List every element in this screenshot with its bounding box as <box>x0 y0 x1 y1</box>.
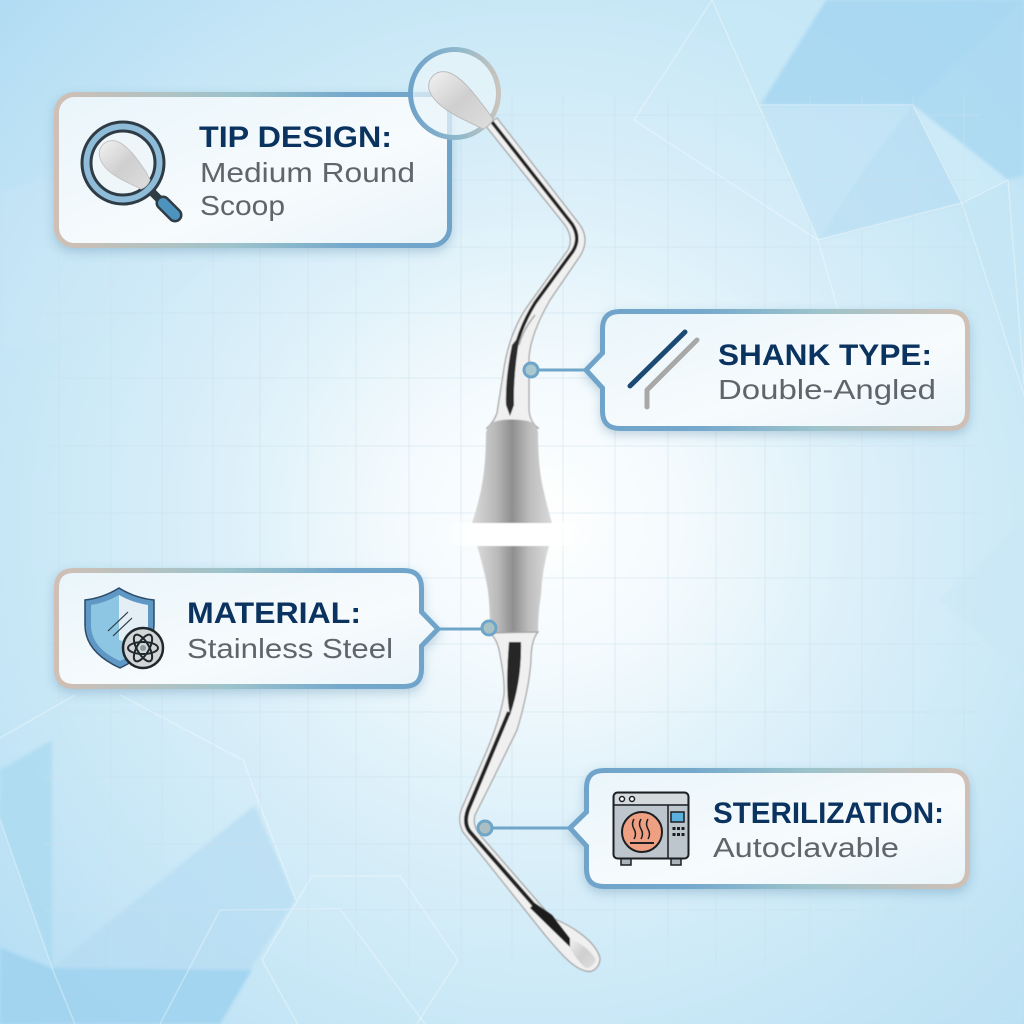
icon: shield with atom <box>85 588 163 668</box>
connector <box>478 821 570 835</box>
heading: STERILIZATION: <box>713 797 944 830</box>
connector <box>438 621 496 635</box>
upper shaft <box>485 118 585 428</box>
panel box <box>56 570 438 686</box>
heading: MATERIAL: <box>187 597 361 630</box>
body text: Double-Angled <box>718 374 936 405</box>
panel: shank type <box>524 312 968 428</box>
panel box <box>56 94 450 246</box>
panel: material <box>56 570 496 686</box>
icon: double angle <box>630 332 697 407</box>
panel box <box>586 312 968 428</box>
body text: Medium Round <box>200 157 415 188</box>
panel: sterilization <box>478 770 968 886</box>
panel box <box>570 770 968 886</box>
upper handle <box>472 420 552 523</box>
body text: Stainless Steel <box>187 633 393 664</box>
upper scoop <box>429 72 493 129</box>
lower handle <box>477 546 549 634</box>
connector <box>524 363 586 377</box>
icon: autoclave <box>614 792 688 865</box>
heading: TIP DESIGN: <box>199 121 392 154</box>
lower shaft <box>460 632 600 971</box>
panel: tip design <box>56 94 450 246</box>
body text line 2: Scoop <box>200 190 285 221</box>
lower scoop highlight <box>570 938 596 968</box>
upper shaft dark reflection <box>492 122 577 416</box>
icon: magnifier <box>82 122 175 215</box>
magnified tip circle <box>410 50 498 138</box>
heading: SHANK TYPE: <box>718 339 932 372</box>
lower shaft dark reflection <box>466 642 576 949</box>
white gap band <box>440 522 590 546</box>
body text: Autoclavable <box>713 832 899 863</box>
instrument: double-ended scoop <box>440 118 600 971</box>
